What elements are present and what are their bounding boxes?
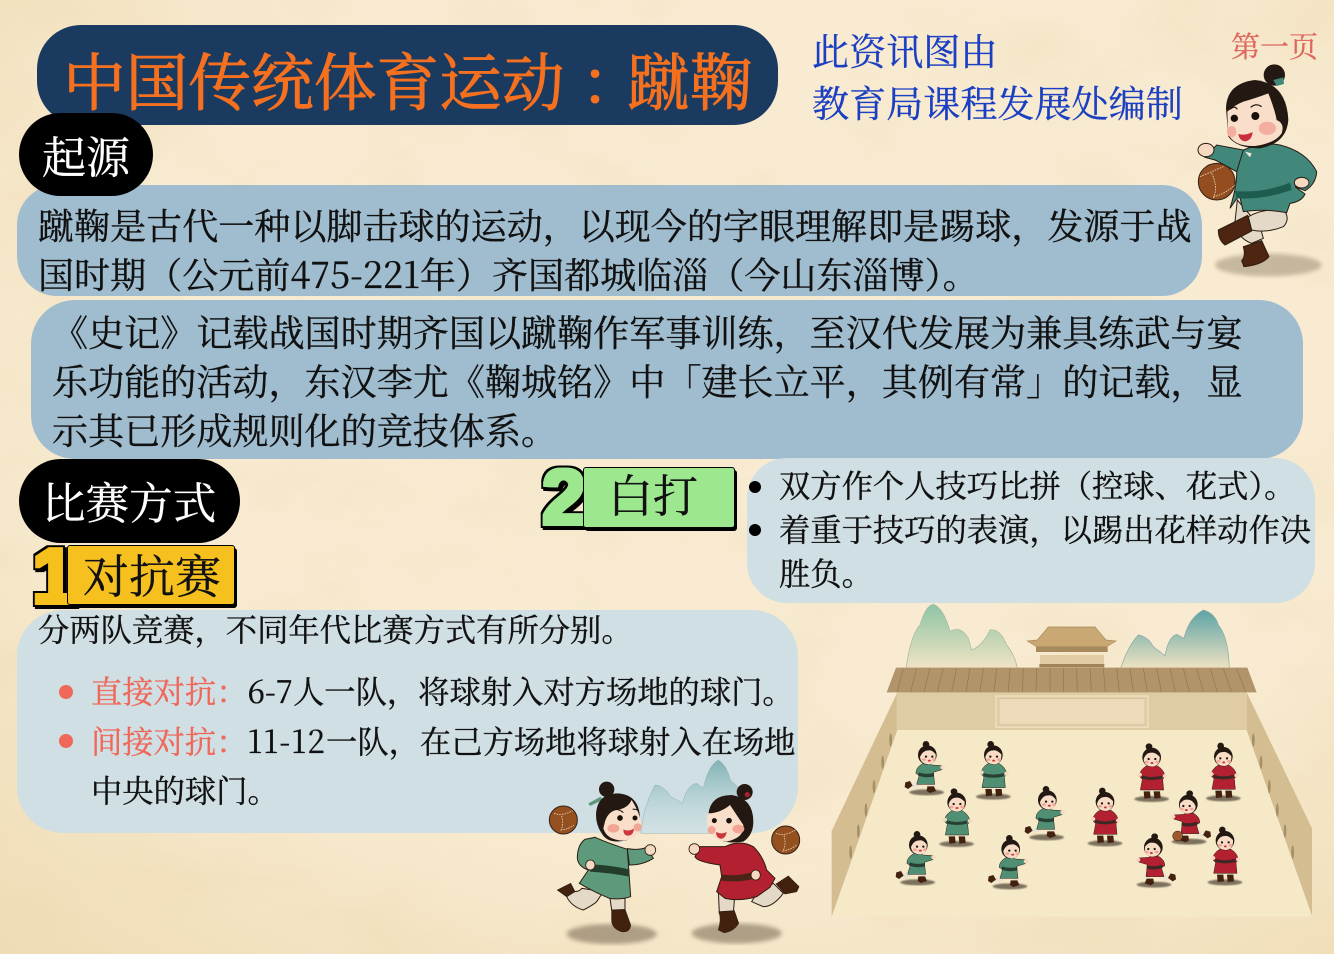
side wall left xyxy=(832,692,897,917)
mountains behind players xyxy=(641,760,743,833)
label box: solo play: 白打 xyxy=(608,460,698,525)
numeral 1: 1 xyxy=(32,532,75,620)
title banner: 中国传统体育运动 ：蹴鞠 xyxy=(63,33,753,123)
label box: solo play xyxy=(583,467,735,528)
illustration: courtyard with players xyxy=(832,604,1312,917)
panel: origin paragraph 2: 《史记》记载战国时期齐国以蹴鞠作军事训练，至汉代发展为兼具练武与宴 xyxy=(52,305,1243,357)
back wall xyxy=(897,692,1247,730)
panel: origin paragraph 2 xyxy=(31,300,1303,459)
panel: confrontation match description xyxy=(17,610,798,833)
panel: solo play description: 着重于技巧的表演，以踢出花样动作决 xyxy=(779,505,1311,550)
credit text xyxy=(812,22,1183,128)
side wall right xyxy=(1247,692,1312,916)
head xyxy=(1226,80,1288,148)
standing leg xyxy=(1235,200,1263,243)
red team xyxy=(1088,743,1242,888)
panel: confrontation match description: 分两队竞赛，不同年代比赛方式有所分别。 xyxy=(38,605,633,650)
raised leg xyxy=(1248,210,1287,231)
panel: origin paragraph 1: 蹴鞠是古代一种以脚击球的运动，以现今的字眼理解即是踢球，发源于战 xyxy=(38,198,1192,250)
panel: confrontation match description: 间接对抗：11-12一队，在己方场地将球射入在场地 xyxy=(91,717,795,762)
label box: confrontation match: 对抗赛 xyxy=(83,541,221,607)
roof xyxy=(887,668,1257,692)
panel: confrontation match description: 中央的球门。 xyxy=(91,766,279,811)
numeral 2: 2 xyxy=(542,453,585,541)
mountains left xyxy=(906,604,1017,668)
panel: origin paragraph 1: 国时期（公元前475-221年）齐国都城临淄（今山东淄博）。 xyxy=(38,247,979,299)
wall arrow slits xyxy=(849,733,1294,859)
bullet xyxy=(749,481,761,493)
green player xyxy=(557,782,657,944)
panel: solo play description: 胜负。 xyxy=(779,549,873,594)
badge: 1 confrontation match xyxy=(32,532,237,620)
panel: origin paragraph 1 xyxy=(17,185,1202,296)
ball right xyxy=(772,826,800,854)
bun xyxy=(1264,64,1285,86)
red player xyxy=(689,784,799,943)
panel: solo play description xyxy=(747,458,1315,603)
pavilion xyxy=(1027,627,1116,667)
credit text: 此资讯图由 xyxy=(812,22,997,76)
heading: origin: 起源 xyxy=(42,122,130,186)
heading: origin xyxy=(19,113,153,196)
bullet xyxy=(59,734,73,748)
ball left xyxy=(549,806,577,834)
badge: 2 solo play xyxy=(540,453,737,541)
panel: origin paragraph 2: 示其已形成规则化的竞技体系。 xyxy=(52,403,557,455)
ball xyxy=(1198,163,1235,200)
courtyard ball xyxy=(1173,831,1183,841)
credit text: 教育局课程发展处编制 xyxy=(812,74,1183,128)
heading: match format: 比赛方式 xyxy=(42,470,216,532)
courtyard floor xyxy=(832,730,1312,917)
panel: origin paragraph 2: 乐功能的活动，东汉李尤《鞠城铭》中「建长立平，其例有常」的记载，显 xyxy=(52,354,1243,406)
plaque xyxy=(996,696,1148,727)
green team xyxy=(896,741,1065,889)
panel: confrontation match description: 直接对抗：6-7人一队，将球射入对方场地的球门。 xyxy=(91,667,794,712)
heading: match format xyxy=(19,459,240,543)
illustration: player with ball top right xyxy=(1198,64,1322,276)
bullet xyxy=(59,685,73,699)
bullet xyxy=(749,524,761,536)
mountains right xyxy=(1121,610,1229,668)
panel: solo play description: 双方作个人技巧比拼（控球、花式）。 xyxy=(779,461,1295,506)
illustration: two players running xyxy=(549,760,800,944)
robe xyxy=(1230,144,1317,213)
page number: 第一页 xyxy=(1231,25,1318,66)
